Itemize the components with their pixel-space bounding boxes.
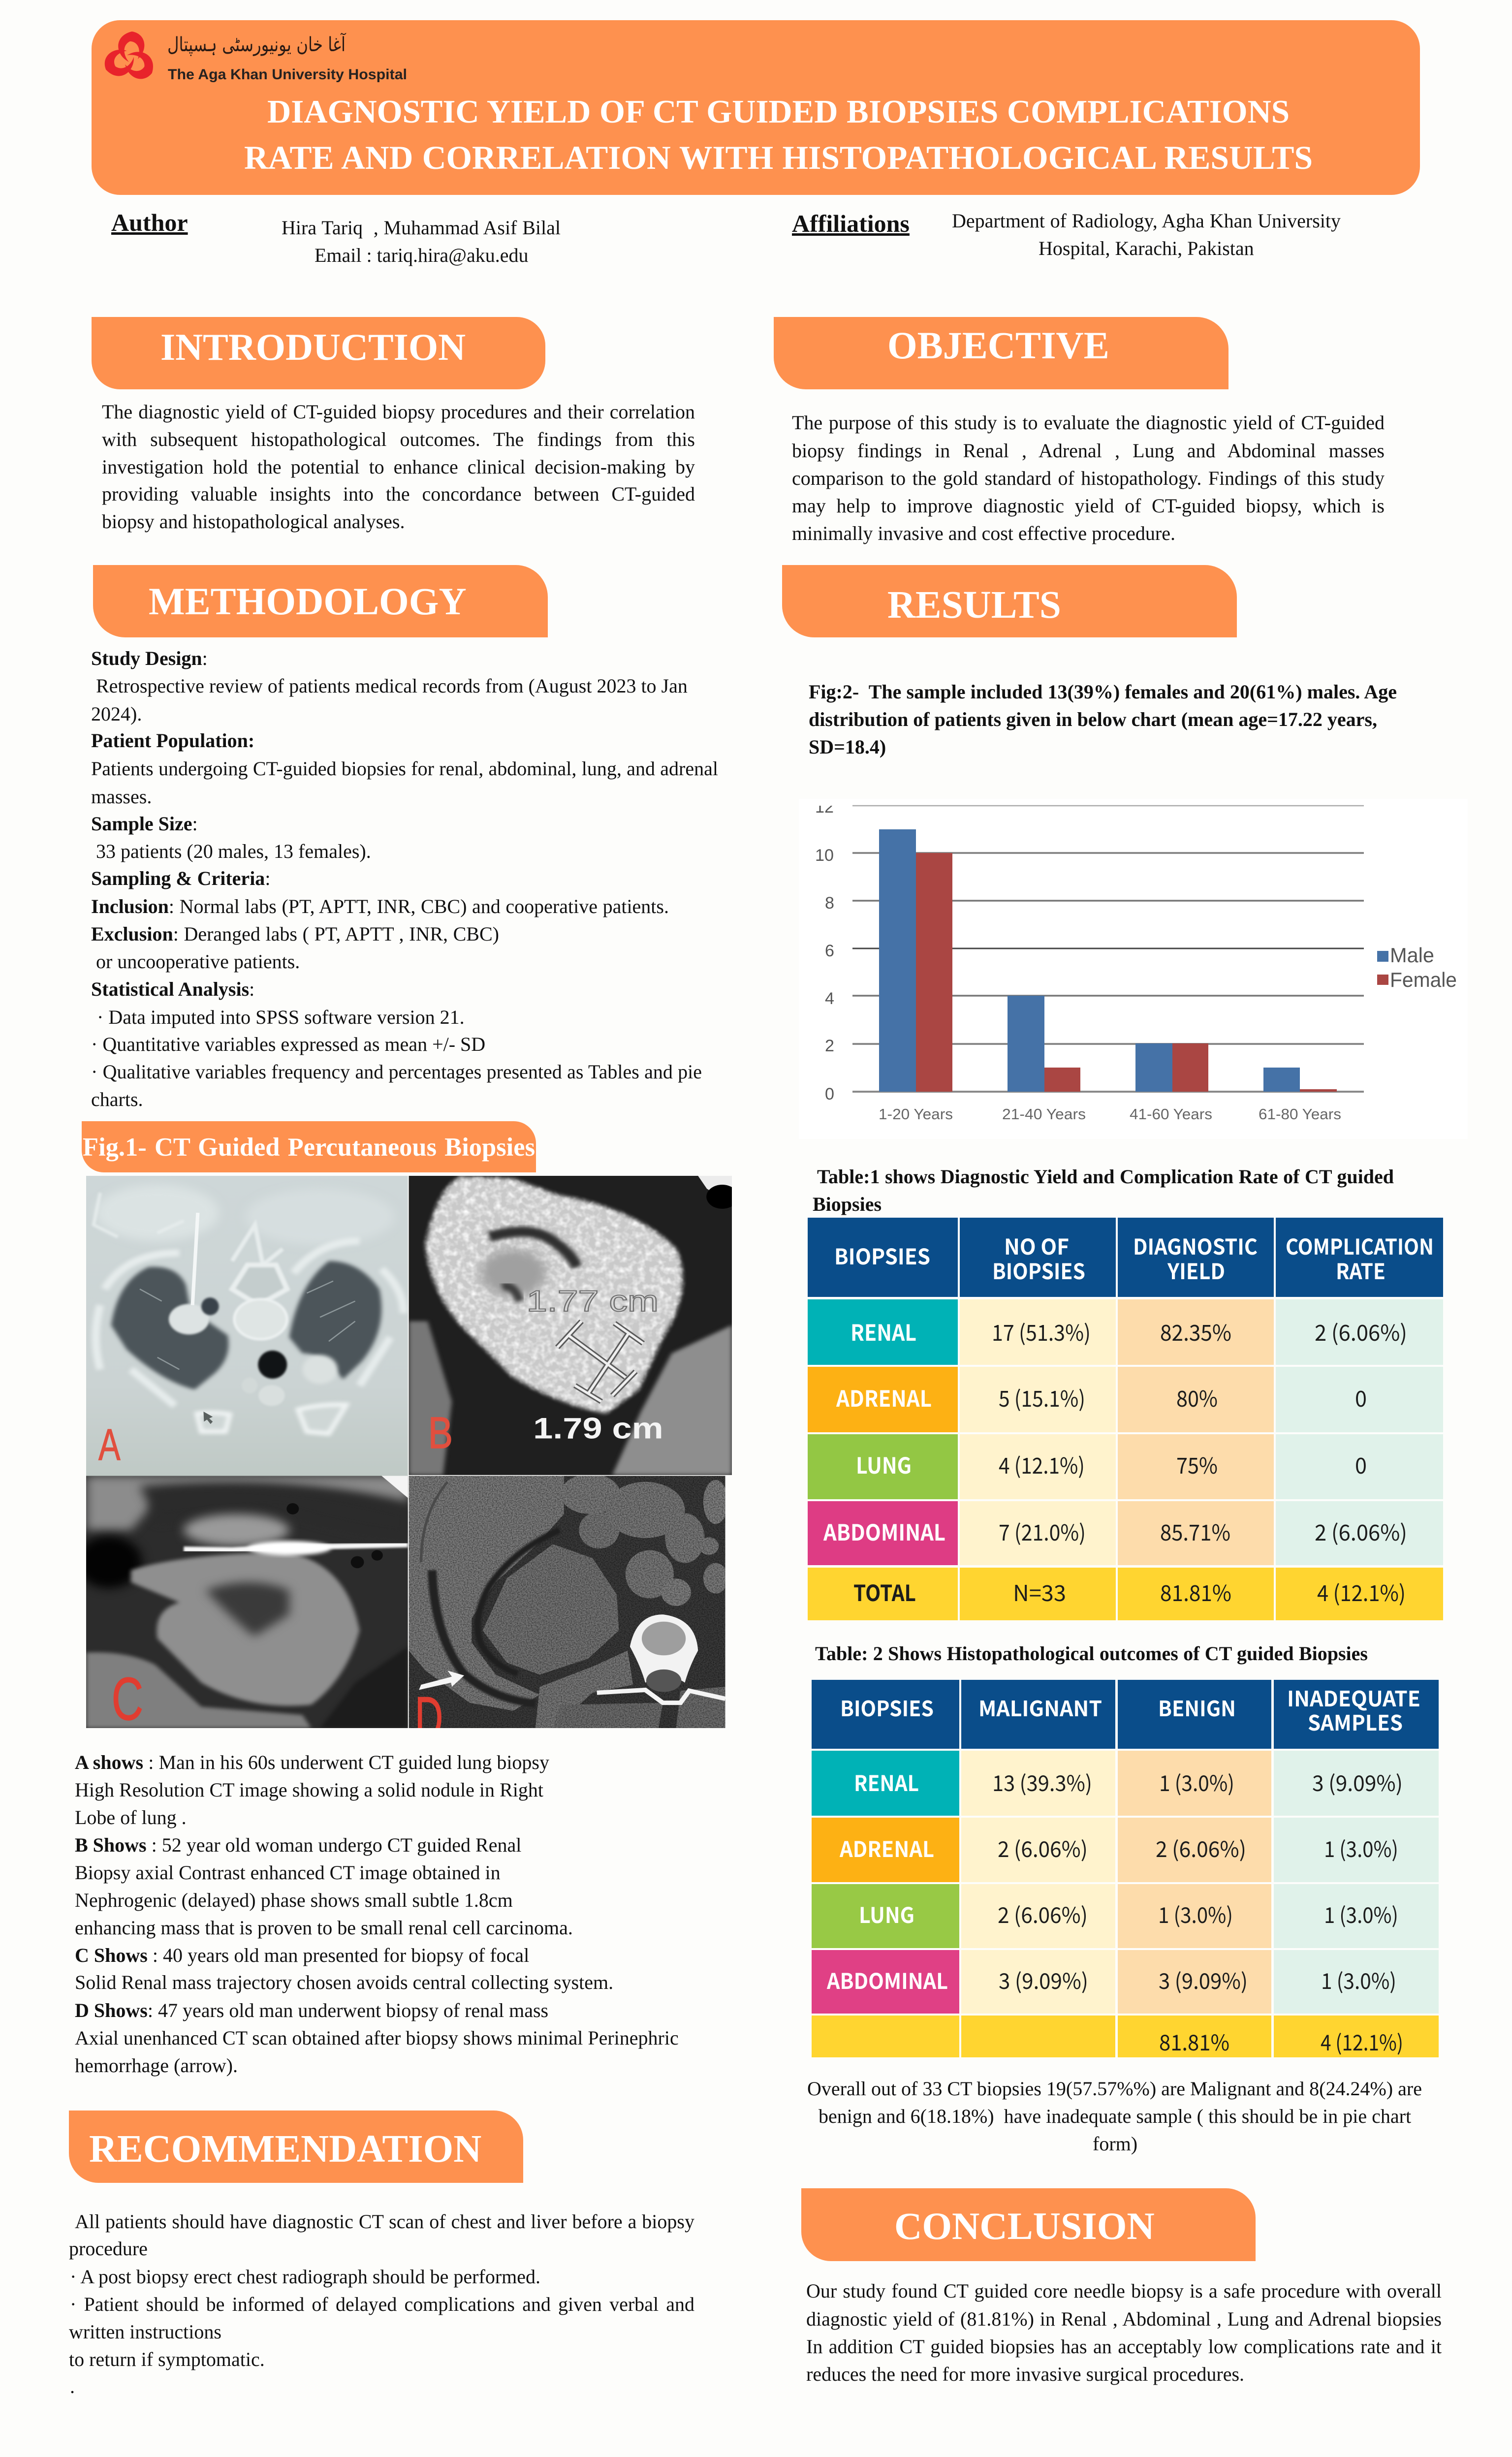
- text: methodology: or uncooperative patients.: [96, 950, 300, 973]
- row: abdominal: 3 (9.09%): [999, 1964, 1088, 1995]
- text: introduction: [102, 401, 695, 533]
- heading: conclusion: [801, 2188, 1256, 2261]
- text: figure 1 captions: hemorrhage (arrow).: [75, 2054, 238, 2077]
- CT panel C: biopsy needle: [76, 1476, 408, 1733]
- caliper label 1.77 cm: 1.77 cm: [527, 1285, 659, 1318]
- text: objective: minimally invasive and cost effective procedure.: [792, 522, 1175, 544]
- row: abdominal: ABDOMINAL: [823, 1515, 945, 1547]
- header row: NO OF: [1004, 1229, 1069, 1261]
- text: methodology: 33 patients (20 males, 13 females).: [96, 840, 371, 862]
- text: overall outcome summary: Overall out of 33 CT biopsies 19(57.57%%) are Malignant and 8(24.24%) are: [807, 2078, 1422, 2100]
- text: figure 1 captions: High Resolution CT image showing a solid nodule in Right: [75, 1779, 543, 1801]
- y axis labels: 4: [825, 989, 834, 1008]
- text: figure 1 captions: C Shows : 40 years old man presented for biopsy of focal: [75, 1944, 529, 1966]
- text: recommendation: All patients should have diagnostic CT scan of chest and liver before a biopsy: [75, 2210, 694, 2233]
- arrow: [419, 1670, 464, 1690]
- text: methodology: Patient Population:: [91, 729, 254, 752]
- text: table 1 title: Table:1 shows Diagnostic Yield and Complication Rate of CT guided: [817, 1166, 1394, 1188]
- row: abdominal: ABDOMINAL: [826, 1964, 948, 1995]
- title: [244, 94, 1313, 176]
- text: figure 1 captions: [75, 1749, 685, 2079]
- text: recommendation: to return if symptomatic.: [69, 2348, 265, 2370]
- header row: [808, 1218, 1443, 1297]
- heading: introduction: [92, 317, 545, 389]
- heading: recommendation: RECOMMENDATION: [89, 2128, 481, 2171]
- text: methodology: Inclusion: Normal labs (PT, APTT, INR, CBC) and cooperative patients.: [91, 895, 669, 917]
- row: lung: 1 (3.0%): [1158, 1898, 1233, 1929]
- figure 1: CT scan panels: [86, 1176, 732, 1728]
- heading: recommendation: [69, 2110, 523, 2183]
- table 2: histopathological outcomes: [812, 1680, 1439, 2057]
- bars: 61-80 years: [1263, 1068, 1337, 1092]
- heading: introduction: INTRODUCTION: [160, 326, 466, 368]
- header row: [812, 1680, 1439, 1749]
- row: adrenal: 2 (6.06%): [1156, 1832, 1246, 1863]
- calipers: [557, 1321, 643, 1402]
- row: renal: RENAL: [854, 1766, 919, 1797]
- text: figure 1 captions: enhancing mass that is proven to be small renal cell carcinoma.: [75, 1917, 573, 1939]
- text: methodology: · Data imputed into SPSS software version 21.: [97, 1006, 465, 1028]
- x axis labels: [879, 1105, 1341, 1123]
- heading: objective: OBJECTIVE: [887, 324, 1109, 367]
- author names and email: Hira Tariq , Muhammad Asif Bilal: [282, 217, 561, 239]
- row: abdominal: [808, 1501, 1443, 1565]
- text: objective: comparison to the gold standard of histopathology. Findings of this study: [792, 467, 1385, 489]
- text: figure 2 caption: Fig:2- The sample included 13(39%) females and 20(61%) males. Age: [809, 681, 1397, 703]
- text: methodology: 2024).: [91, 703, 142, 725]
- row: renal: 13 (39.3%): [992, 1766, 1092, 1797]
- author label: Author: [111, 209, 188, 236]
- text: objective: biopsy findings in Renal , Adrenal , Lung and Abdominal masses: [792, 440, 1385, 462]
- text: recommendation: .: [70, 2375, 75, 2397]
- row: renal: RENAL: [850, 1315, 916, 1347]
- heading: methodology: METHODOLOGY: [149, 580, 467, 623]
- row: adrenal: 5 (15.1%): [999, 1381, 1085, 1413]
- panel label A: A: [98, 1420, 121, 1469]
- row: totals: 4 (12.1%): [1321, 2025, 1403, 2057]
- text: figure 2 caption: SD=18.4): [809, 736, 886, 758]
- text: conclusion: Our study found CT guided core needle biopsy is a safe procedure with overall: [806, 2280, 1442, 2302]
- caliper label 1.79 cm: 1.79 cm: [533, 1412, 663, 1445]
- bar chart: age distribution by sex: [799, 799, 1468, 1139]
- row: renal: 2 (6.06%): [1315, 1315, 1407, 1347]
- row: adrenal: [812, 1818, 1439, 1882]
- row: lung: [808, 1434, 1443, 1499]
- row: renal: 3 (9.09%): [1312, 1766, 1403, 1797]
- CT panel B: renal mass with calipers: [409, 1176, 738, 1475]
- row: abdominal: 7 (21.0%): [999, 1515, 1086, 1547]
- heading: figure 1: Fig.1- CT Guided Percutaneous Biopsies: [83, 1133, 535, 1162]
- legend: Male: [1390, 944, 1434, 967]
- row: lung: 2 (6.06%): [998, 1898, 1088, 1929]
- bars: 21-40 years: [1008, 996, 1080, 1092]
- row: adrenal: 2 (6.06%): [998, 1832, 1088, 1863]
- CT panel D: perinephric hemorrhage: [409, 1474, 728, 1752]
- text: objective: [792, 409, 1385, 547]
- row: lung: LUNG: [856, 1448, 912, 1480]
- author names and email: Email : tariq.hira@aku.edu: [315, 244, 528, 266]
- text: overall outcome summary: benign and 6(18.18%) have inadequate sample ( this should be in pie chart: [819, 2105, 1411, 2127]
- text: methodology: Sample Size:: [91, 813, 198, 835]
- text: methodology: Sampling & Criteria:: [91, 867, 270, 889]
- text: introduction: with subsequent histopathological outcomes. The findings from this: [102, 428, 695, 450]
- text: conclusion: diagnostic yield of (81.81%) in Renal , Abdominal , Lung and Adrenal biopsies: [806, 2308, 1442, 2330]
- logo english text: The Aga Khan University Hospital: [168, 66, 407, 83]
- text: methodology: Study Design:: [91, 647, 208, 669]
- text: recommendation: written instructions: [69, 2321, 221, 2343]
- header row: MALIGNANT: [978, 1692, 1102, 1723]
- row: lung: 1 (3.0%): [1324, 1898, 1398, 1929]
- row: lung: LUNG: [859, 1898, 914, 1929]
- heading: figure 1: [82, 1121, 536, 1172]
- row: abdominal: 2 (6.06%): [1315, 1515, 1407, 1547]
- row: lung: 75%: [1176, 1448, 1218, 1480]
- y axis labels: 10: [815, 846, 834, 865]
- x axis labels: 21-40 Years: [1002, 1105, 1086, 1123]
- title: DIAGNOSTIC YIELD OF CT GUIDED BIOPSIES COMPLICATIONS: [267, 94, 1290, 130]
- row: total: 81.81%: [1160, 1575, 1231, 1607]
- text: figure 1 captions: Lobe of lung .: [75, 1806, 187, 1828]
- text: figure 1 captions: Biopsy axial Contrast enhanced CT image obtained in: [75, 1861, 501, 1884]
- text: methodology: · Quantitative variables expressed as mean +/- SD: [91, 1033, 485, 1055]
- row: adrenal: ADRENAL: [839, 1832, 934, 1863]
- table 1: diagnostic yield and complication rate: [808, 1218, 1443, 1620]
- header row: SAMPLES: [1308, 1706, 1403, 1737]
- y axis labels: 8: [825, 894, 834, 913]
- header row: DIAGNOSTIC: [1133, 1229, 1258, 1261]
- text: conclusion: In addition CT guided biopsies has an acceptably low complications rate and it: [806, 2335, 1442, 2358]
- text: methodology: Exclusion: Deranged labs ( PT, APTT , INR, CBC): [91, 923, 499, 945]
- text: recommendation: · Patient should be informed of delayed complications and given verbal and: [70, 2293, 694, 2315]
- heading: results: [782, 565, 1237, 637]
- row: lung: [812, 1884, 1439, 1948]
- row: total: N=33: [1013, 1575, 1066, 1607]
- row: adrenal: 1 (3.0%): [1324, 1832, 1398, 1863]
- affiliations text: Department of Radiology, Agha Khan University: [952, 210, 1341, 232]
- text: methodology: · Qualitative variables frequency and percentages presented as Tables and pie: [91, 1061, 702, 1083]
- x axis labels: 1-20 Years: [879, 1105, 953, 1123]
- heading: results: RESULTS: [887, 584, 1061, 627]
- text: figure 1 captions: D Shows: 47 years old man underwent biopsy of renal mass: [75, 1999, 548, 2021]
- text: figure 1 captions: Axial unenhanced CT scan obtained after biopsy shows minimal Perinephric: [75, 2027, 679, 2049]
- y axis labels: 6: [825, 942, 834, 960]
- affiliations label: Affiliations: [792, 210, 910, 237]
- text: recommendation: procedure: [69, 2237, 148, 2260]
- text: figure 2 caption: distribution of patients given in below chart (mean age=17.22 years,: [809, 708, 1377, 730]
- y axis labels: 0: [825, 1085, 834, 1103]
- text: conclusion: reduces the need for more invasive surgical procedures.: [806, 2363, 1244, 2385]
- row: totals: 81.81%: [1159, 2025, 1229, 2057]
- row: renal: [808, 1299, 1443, 1365]
- text: figure 1 captions: A shows : Man in his 60s underwent CT guided lung biopsy: [75, 1751, 549, 1773]
- text: table 1 title: Biopsies: [813, 1193, 882, 1215]
- x axis labels: 61-80 Years: [1259, 1105, 1341, 1123]
- y axis labels: 2: [825, 1037, 834, 1055]
- bars: 1-20 years: [879, 829, 952, 1092]
- header row: INADEQUATE: [1287, 1682, 1420, 1713]
- text: figure 1 captions: B Shows : 52 year old woman undergo CT guided Renal: [75, 1834, 521, 1856]
- header row: BIOPSIES: [992, 1254, 1085, 1286]
- y axis labels: [815, 798, 834, 1103]
- affiliations text: Hospital, Karachi, Pakistan: [1039, 237, 1254, 259]
- row: total: [808, 1568, 1443, 1620]
- row: abdominal: [812, 1950, 1439, 2014]
- logo: Aga Khan University Hospital: [104, 32, 407, 83]
- header row: YIELD: [1167, 1254, 1225, 1286]
- row: renal: 1 (3.0%): [1159, 1766, 1234, 1797]
- logo urdu text: آغا خان یونیورسٹی ہسپتال: [167, 32, 346, 56]
- text: introduction: investigation hold the potential to enhance clinical decision-making by: [102, 456, 695, 478]
- row: lung: 4 (12.1%): [999, 1448, 1085, 1480]
- panel label B: B: [428, 1408, 453, 1457]
- text: objective: may help to improve diagnostic yield of CT-guided biopsy, which is: [792, 495, 1385, 517]
- text: introduction: biopsy and histopathological analyses.: [102, 510, 405, 533]
- row: total: TOTAL: [853, 1575, 916, 1607]
- row: renal: 17 (51.3%): [992, 1315, 1091, 1347]
- row: adrenal: 80%: [1176, 1381, 1218, 1413]
- row: renal: 82.35%: [1160, 1315, 1231, 1347]
- text: methodology: masses.: [91, 786, 152, 808]
- row: adrenal: [808, 1367, 1443, 1432]
- text: methodology: Patients undergoing CT-guided biopsies for renal, abdominal, lung, and adrenal: [91, 757, 718, 780]
- legend: Female: [1390, 968, 1457, 991]
- text: recommendation: · A post biopsy erect chest radiograph should be performed.: [70, 2266, 540, 2288]
- icon: red swirl emblem: [100, 32, 159, 84]
- row: adrenal: 0: [1355, 1381, 1367, 1413]
- row: abdominal: 1 (3.0%): [1321, 1964, 1396, 1995]
- header row: BIOPSIES: [840, 1692, 934, 1723]
- text: introduction: The diagnostic yield of CT-guided biopsy procedures and their correlation: [102, 401, 695, 423]
- text: figure 1 captions: Nephrogenic (delayed) phase shows small subtle 1.8cm: [75, 1889, 513, 1911]
- header row: BIOPSIES: [834, 1239, 930, 1271]
- text: table 1 title: [813, 1163, 1394, 1218]
- text: figure 2 caption: [809, 678, 1397, 761]
- text: overall outcome summary: [807, 2075, 1421, 2158]
- text: recommendation: [69, 2208, 696, 2401]
- row: total: 4 (12.1%): [1317, 1575, 1406, 1607]
- text: objective: The purpose of this study is to evaluate the diagnostic yield of CT-guided: [792, 411, 1385, 434]
- text: methodology: charts.: [91, 1088, 143, 1110]
- row: abdominal: 85.71%: [1160, 1515, 1230, 1547]
- header banner: [92, 20, 1420, 195]
- text: methodology: Statistical Analysis:: [91, 978, 254, 1000]
- legend: [1377, 944, 1457, 991]
- header row: BENIGN: [1158, 1692, 1236, 1723]
- row: lung: 0: [1355, 1448, 1367, 1480]
- row: abdominal: 3 (9.09%): [1159, 1964, 1248, 1995]
- bars: 41-60 years: [1135, 1043, 1208, 1092]
- text: methodology: [91, 645, 721, 1112]
- row: totals: [812, 2016, 1439, 2057]
- x axis labels: 41-60 Years: [1130, 1105, 1212, 1123]
- text: methodology: Retrospective review of patients medical records from (August 2023 to Jan: [96, 675, 688, 697]
- row: renal: [812, 1751, 1439, 1816]
- title: RATE AND CORRELATION WITH HISTOPATHOLOGICAL RESULTS: [244, 139, 1313, 176]
- text: conclusion: [806, 2277, 1442, 2388]
- header row: RATE: [1336, 1254, 1386, 1286]
- text: introduction: providing valuable insights into the concordance between CT-guided: [102, 483, 695, 505]
- heading: objective: [774, 317, 1228, 389]
- author names and email: [282, 217, 561, 266]
- heading: conclusion: CONCLUSION: [894, 2205, 1155, 2247]
- affiliations text: [952, 210, 1341, 259]
- text: table 2 title: Table: 2 Shows Histopathological outcomes of CT guided Biopsies: [815, 1642, 1368, 1665]
- CT panel A: lung: [86, 1176, 408, 1476]
- heading: methodology: [93, 565, 548, 637]
- row: adrenal: ADRENAL: [836, 1381, 932, 1413]
- text: overall outcome summary: form): [1093, 2133, 1137, 2155]
- text: figure 1 captions: Solid Renal mass trajectory chosen avoids central collecting system.: [75, 1971, 613, 1993]
